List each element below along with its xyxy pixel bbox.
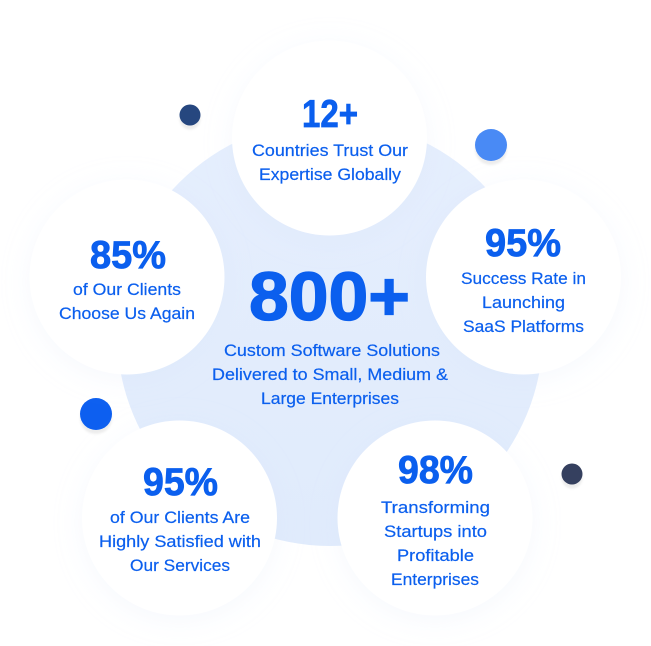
icon: blue dot left (80, 398, 112, 430)
central description (212, 342, 448, 408)
text: startups: Startups into (384, 523, 487, 541)
text: repeat clients: of Our Clients (73, 281, 181, 299)
icon: slate dot right (562, 464, 582, 484)
number: 95%: 95% (143, 461, 218, 504)
icon: navy dot top left (180, 104, 200, 126)
panel: SaaS success stat (426, 180, 621, 374)
text: startups: Transforming (381, 499, 490, 517)
central description: Custom Software Solutions (224, 342, 440, 360)
text: startups: Profitable (397, 547, 474, 565)
text: countries (252, 142, 409, 184)
icon: light blue dot top right (475, 129, 507, 161)
central number: 800+ (249, 258, 410, 335)
panel: startups stat (338, 420, 532, 616)
central background circle (117, 120, 543, 546)
text: startups: Enterprises (391, 571, 479, 589)
text: countries: Countries Trust Our (252, 142, 409, 160)
text: startups (381, 499, 490, 589)
text: SaaS success: Success Rate in (461, 270, 586, 288)
text: countries: Expertise Globally (259, 166, 402, 184)
number: 98%: 98% (398, 449, 473, 492)
text: SaaS success: Launching (482, 294, 565, 312)
panel: repeat clients stat (30, 180, 224, 374)
text: satisfaction: of Our Clients Are (110, 509, 250, 527)
number: 95%: 95% (485, 222, 561, 265)
central description: Large Enterprises (261, 390, 399, 408)
central description: Delivered to Small, Medium & (212, 366, 448, 384)
text: satisfaction: Highly Satisfied with (99, 533, 261, 551)
text: satisfaction: Our Services (130, 557, 230, 575)
number: 85%: 85% (90, 234, 166, 277)
panel: central statistic (212, 258, 448, 408)
text: repeat clients (59, 281, 195, 323)
number: 12+: 12+ (302, 93, 358, 136)
text: SaaS success (461, 270, 586, 336)
panel: countries stat (232, 40, 427, 236)
text: satisfaction (99, 509, 261, 575)
panel: client satisfaction stat (82, 420, 277, 616)
text: repeat clients: Choose Us Again (59, 305, 195, 323)
text: SaaS success: SaaS Platforms (463, 318, 584, 336)
